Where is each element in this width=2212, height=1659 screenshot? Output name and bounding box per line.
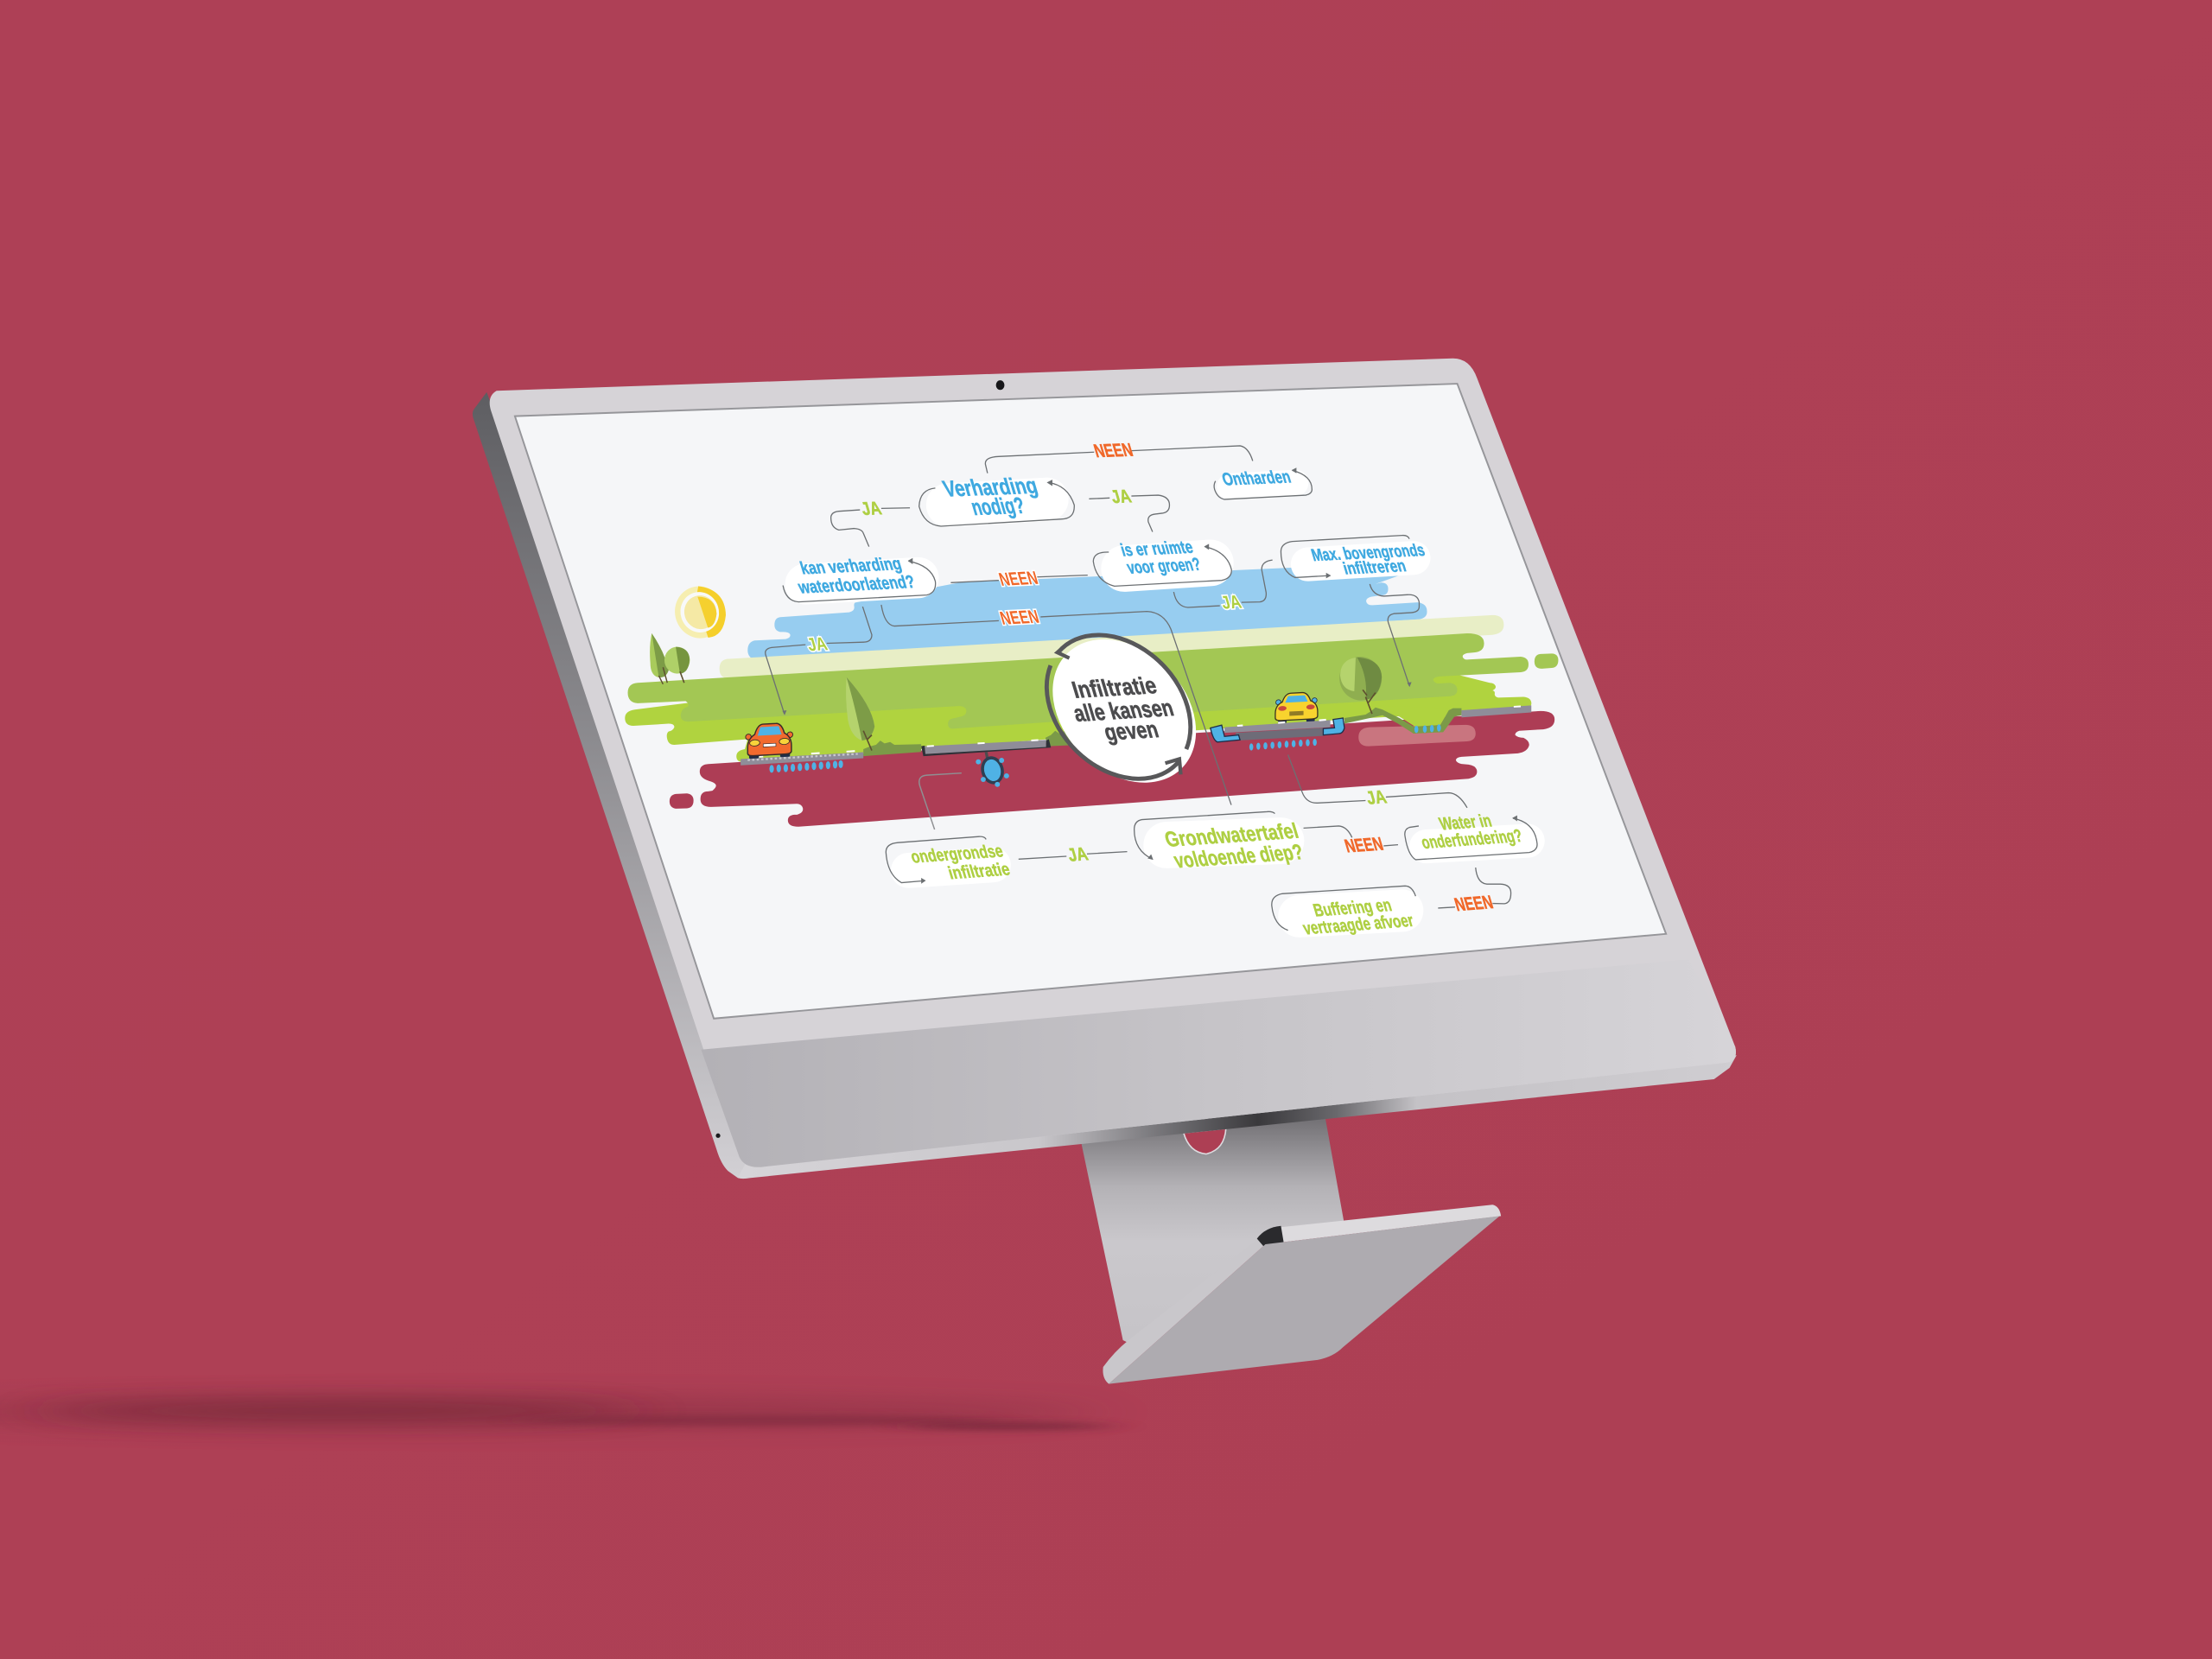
connector: JA right xyxy=(1089,486,1169,532)
connector: NEEN Water to Buffering: NEEN xyxy=(1452,891,1496,915)
cycle arrow: bottom xyxy=(1046,665,1181,779)
outcome pill: ondergrondse infiltratie xyxy=(886,836,1013,884)
road: gutter xyxy=(1211,718,1344,751)
connector: JA Grondwatertafel to ondergrondse: JA xyxy=(1065,843,1090,866)
stand foot xyxy=(1103,1205,1501,1384)
connector: NEEN to Verharding: NEEN xyxy=(996,567,1040,590)
connector: NEEN to Verharding xyxy=(950,567,1088,590)
decision pill: Verharding nodig: Verharding xyxy=(940,473,1040,502)
band: soil xyxy=(700,711,1554,827)
band: pale grass xyxy=(720,615,1503,678)
grass strips xyxy=(863,708,1461,756)
badge title: alle kansen xyxy=(1070,695,1177,727)
band: lime ground xyxy=(625,663,1531,762)
badge title: Infiltratie xyxy=(1069,672,1160,703)
decision pill: is er ruimte voor groen: voor groen? xyxy=(1124,555,1203,578)
decision pill: Verharding nodig: nodig? xyxy=(968,493,1028,520)
bottom rim xyxy=(738,1055,1737,1179)
connector: JA Water to gutter xyxy=(1288,754,1467,809)
webcam xyxy=(996,380,1004,390)
decision pill: kan verharding waterdoorlatend: kan verharding xyxy=(798,554,904,578)
monitor stand xyxy=(1081,1115,1501,1384)
connector: JA Water to gutter: JA xyxy=(1363,786,1389,809)
decision pill: Water in onderfundering: onderfundering? xyxy=(1419,826,1525,853)
sun icon xyxy=(668,580,731,645)
connector: JA Grondwatertafel to ondergrondse xyxy=(1019,843,1127,866)
stand cable hole xyxy=(1184,1128,1226,1154)
connector: JA to Max: JA xyxy=(1218,591,1244,613)
road: permeable paving xyxy=(741,751,863,772)
band: sky xyxy=(747,564,1427,660)
badge title: geven xyxy=(1101,715,1161,746)
drops xyxy=(769,760,843,772)
floating soil block xyxy=(670,793,694,809)
audio port xyxy=(715,1134,721,1138)
outcome pill: Max. bovengronds infiltreren xyxy=(1281,536,1427,579)
arrow: ondergrondse to unit xyxy=(919,773,962,830)
connector: NEEN to Grondwatertafel: NEEN xyxy=(997,606,1041,629)
decision pill: Grondwatertafel: Grondwatertafel xyxy=(1162,819,1301,852)
tree: cone xyxy=(846,677,874,751)
monitor body xyxy=(473,359,1737,1179)
buffer layer xyxy=(1358,725,1476,747)
outcome pill: Max. bovengronds infiltreren: infiltreren xyxy=(1341,556,1408,579)
cycle arrow: top xyxy=(1058,635,1191,749)
outcome pill: Buffering en vertraagde afvoer xyxy=(1272,886,1416,938)
connector: JA to paving: JA xyxy=(804,632,830,655)
connector: NEEN Water to Buffering xyxy=(1438,868,1511,915)
screen xyxy=(515,384,1666,1019)
outcome pill: ondergrondse infiltratie: infiltratie xyxy=(946,860,1013,883)
infiltration unit xyxy=(976,753,1009,787)
outcome pill: Ontharden xyxy=(1214,467,1312,499)
decision pill: Water in onderfundering xyxy=(1405,811,1537,860)
connector: Max to swale xyxy=(1370,584,1419,687)
chin xyxy=(701,959,1736,1167)
connector: JA left: JA xyxy=(858,498,884,519)
road: underground infiltration xyxy=(921,740,1051,759)
connector: JA to Max xyxy=(1173,560,1273,613)
stand neck xyxy=(1081,1115,1344,1344)
central badge xyxy=(1024,611,1224,811)
floating grass block xyxy=(1535,653,1558,669)
decision pill: kan verharding waterdoorlatend: waterdoorlatend? xyxy=(795,572,918,598)
connector: NEEN to Ontharden: NEEN xyxy=(1091,439,1135,461)
connector: NEEN Grondwatertafel to Water: NEEN xyxy=(1342,833,1386,856)
swale with road xyxy=(1414,705,1531,733)
decision pill: is er ruimte voor groen: is er ruimte xyxy=(1118,537,1196,561)
car: orange xyxy=(746,722,793,759)
decision pill: Water in onderfundering: Water in xyxy=(1437,811,1494,834)
connector: JA right: JA xyxy=(1108,486,1134,507)
outcome pill: ondergrondse infiltratie: ondergrondse xyxy=(908,842,1006,868)
outcome pill: Buffering en vertraagde afvoer: vertraagde afvoer xyxy=(1300,911,1416,938)
car: yellow xyxy=(1275,692,1318,723)
outcome pill: Ontharden: Ontharden xyxy=(1220,467,1294,489)
connector: JA to paving xyxy=(766,607,872,715)
decision pill: Grondwatertafel xyxy=(1135,811,1306,873)
band: dark grass xyxy=(628,633,1529,728)
swale lime fill xyxy=(1371,705,1450,727)
connector: NEEN to Ontharden xyxy=(985,439,1253,474)
decision pill: kan verharding waterdoorlatend xyxy=(783,554,936,602)
tree: round xyxy=(1335,652,1386,714)
decision pill: is er ruimte voor groen xyxy=(1093,537,1231,586)
connector: NEEN to Grondwatertafel xyxy=(881,605,1231,805)
drops xyxy=(1249,739,1317,751)
connector: JA left xyxy=(831,498,910,547)
outcome pill: Buffering en vertraagde afvoer: Buffering en xyxy=(1311,895,1394,921)
outcome pill: Max. bovengronds infiltreren: Max. bovengronds xyxy=(1309,541,1427,565)
left rim xyxy=(473,392,790,1178)
decision pill: Grondwatertafel: voldoende diep? xyxy=(1171,840,1306,873)
badge title xyxy=(1069,672,1177,746)
front bezel xyxy=(490,359,1736,1167)
tree: left pair xyxy=(650,633,690,684)
decision pill: Verharding nodig xyxy=(919,473,1074,526)
connector: NEEN Grondwatertafel to Water xyxy=(1304,826,1398,856)
floor shadow xyxy=(0,1396,1110,1431)
